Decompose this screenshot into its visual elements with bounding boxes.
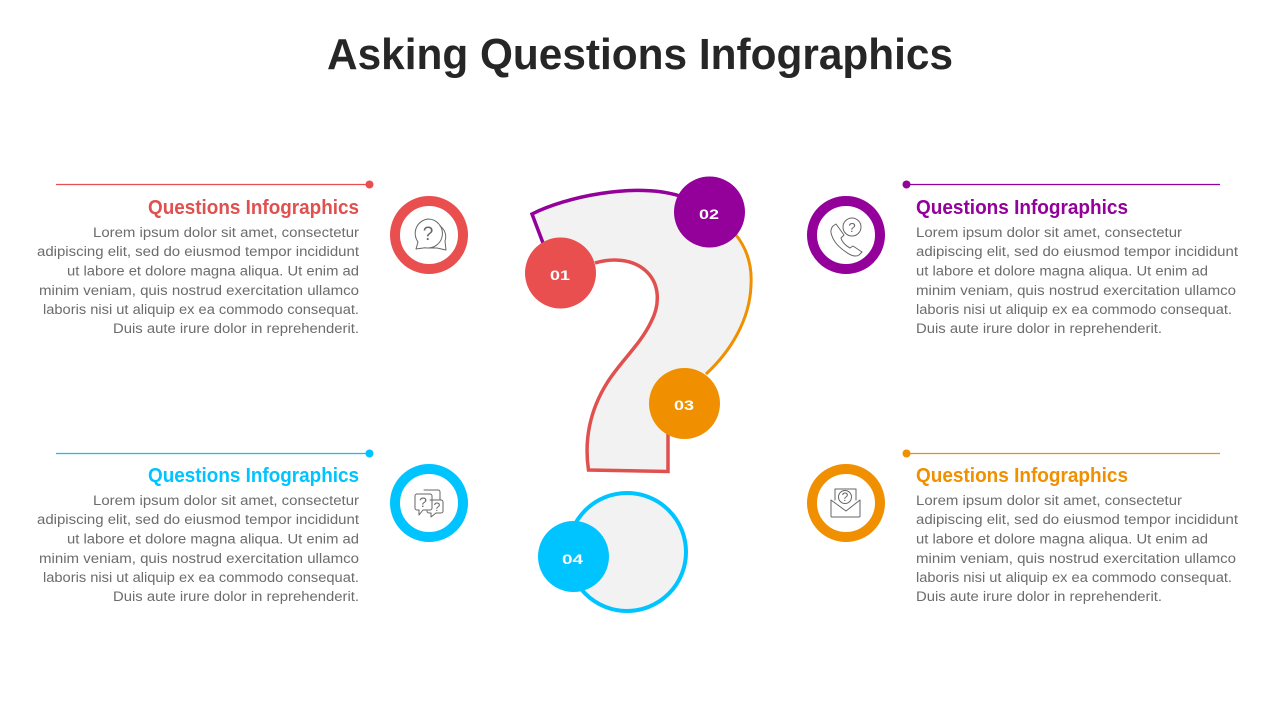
panel: bottom-right text block (902, 450, 1238, 604)
body text cyan panel: ut labore et dolore magna aliqua. Ut enim ad (67, 532, 359, 546)
body text cyan panel (37, 493, 360, 604)
body text red panel: laboris nisi ut aliquip ex ea commodo consequat. (43, 302, 359, 317)
badge 01 (525, 238, 596, 308)
panel: top-left text block (37, 180, 374, 336)
body text purple panel: laboris nisi ut aliquip ex ea commodo consequat. (916, 302, 1232, 317)
badge 03 (649, 368, 720, 439)
icon: phone question in purple ring (812, 201, 880, 269)
panel: bottom-left text block (37, 450, 374, 604)
body text red panel: ut labore et dolore magna aliqua. Ut enim ad (67, 264, 359, 278)
connector line red (56, 180, 374, 188)
body text cyan panel: laboris nisi ut aliquip ex ea commodo consequat. (43, 570, 359, 585)
body text cyan panel: minim veniam, quis nostrud exercitation ullamco (39, 551, 359, 566)
icon: envelope with question in orange ring: ? (842, 490, 849, 504)
connector line orange (902, 450, 1220, 458)
body text purple panel: Duis aute irure dolor in reprehenderit. (916, 321, 1162, 336)
icon: question speech bubbles in red ring: ? (423, 224, 433, 245)
heading purple: Questions Infographics (916, 197, 1128, 219)
heading red: Questions Infographics (148, 197, 359, 219)
body text purple panel (916, 225, 1238, 336)
heading orange: Questions Infographics (916, 465, 1128, 487)
heading cyan: Questions Infographics (148, 465, 359, 487)
title: Asking Questions Infographics (327, 30, 953, 79)
badge 04: 04 (562, 551, 583, 567)
orange outline segment (706, 235, 751, 374)
body text purple panel: minim veniam, quis nostrud exercitation ullamco (916, 283, 1236, 298)
body text orange panel: ut labore et dolore magna aliqua. Ut enim ad (916, 532, 1208, 546)
body text orange panel (916, 493, 1238, 604)
badge 02 (674, 176, 745, 248)
badge 01: 01 (550, 267, 570, 283)
panel: top-right text block (902, 180, 1238, 336)
body text orange panel: Lorem ipsum dolor sit amet, consectetur (916, 493, 1183, 508)
body text cyan panel: Duis aute irure dolor in reprehenderit. (113, 589, 359, 604)
body text cyan panel: adipiscing elit, sed do eiusmod tempor incididunt (37, 512, 359, 527)
red outline segment (587, 260, 668, 472)
body text red panel: minim veniam, quis nostrud exercitation ullamco (39, 283, 359, 298)
icon: multiple chat questions in cyan ring: ? (419, 494, 427, 510)
body text orange panel: Duis aute irure dolor in reprehenderit. (916, 589, 1162, 604)
body text purple panel: adipiscing elit, sed do eiusmod tempor incididunt (916, 244, 1238, 259)
icon: multiple chat questions in cyan ring (395, 469, 463, 537)
icon: multiple chat questions in cyan ring: ? (434, 500, 441, 514)
connector line cyan (56, 450, 374, 458)
icon: phone question in purple ring: ? (848, 220, 856, 235)
body text red panel: Lorem ipsum dolor sit amet, consectetur (93, 225, 360, 240)
body text red panel (37, 225, 360, 336)
icon: question speech bubbles in red ring (395, 201, 463, 269)
body text red panel: Duis aute irure dolor in reprehenderit. (113, 321, 359, 336)
badge 03: 03 (674, 397, 694, 413)
body text orange panel: adipiscing elit, sed do eiusmod tempor incididunt (916, 512, 1238, 527)
body text red panel: adipiscing elit, sed do eiusmod tempor incididunt (37, 244, 359, 259)
purple outline segment (532, 190, 680, 243)
question mark dot (568, 493, 686, 611)
body text cyan panel: Lorem ipsum dolor sit amet, consectetur (93, 493, 360, 508)
body text purple panel: Lorem ipsum dolor sit amet, consectetur (916, 225, 1183, 240)
body text orange panel: laboris nisi ut aliquip ex ea commodo consequat. (916, 570, 1232, 585)
badge 04 (538, 521, 609, 592)
badge 02: 02 (699, 206, 719, 222)
body text orange panel: minim veniam, quis nostrud exercitation ullamco (916, 551, 1236, 566)
chart: central question mark (525, 176, 751, 611)
icon: envelope with question in orange ring (812, 469, 880, 537)
body text purple panel: ut labore et dolore magna aliqua. Ut enim ad (916, 264, 1208, 278)
question mark body (532, 190, 751, 471)
connector line purple (902, 180, 1220, 188)
